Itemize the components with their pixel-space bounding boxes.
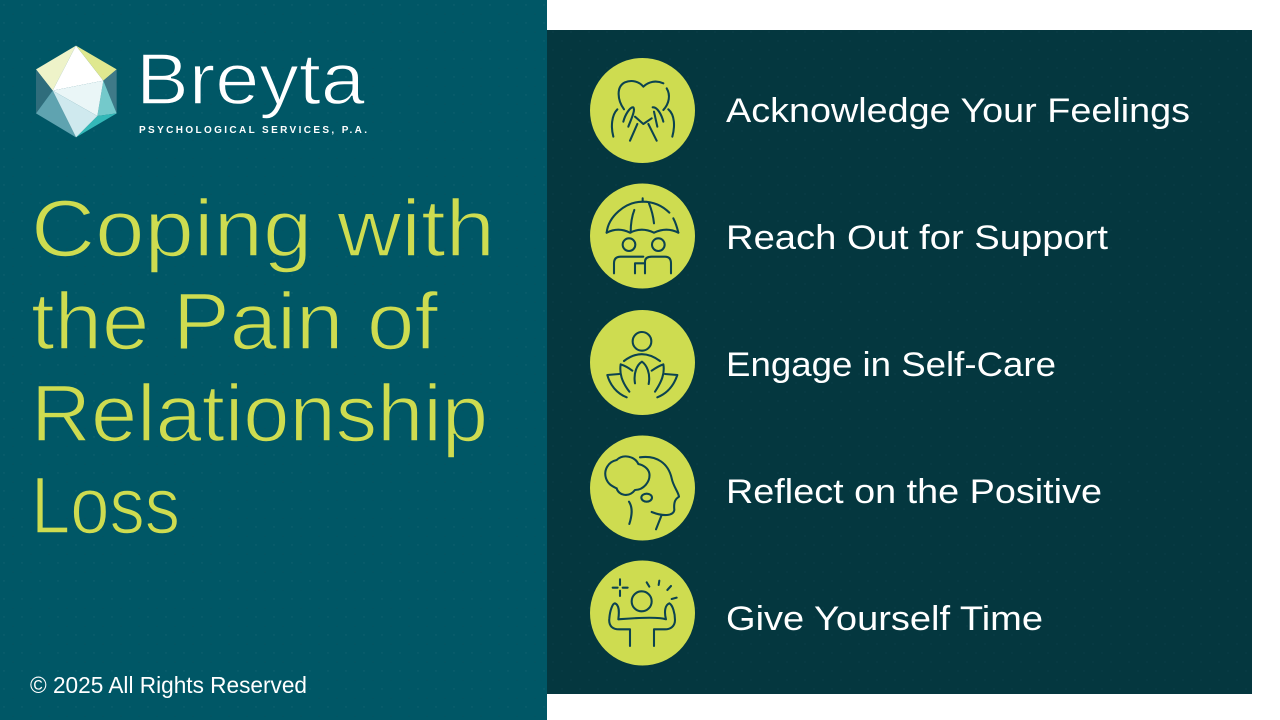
title: Coping with — [31, 184, 495, 274]
label: Give Yourself Time — [726, 600, 1043, 638]
icon: strong person with sparkles — [590, 560, 695, 666]
title: Loss — [31, 461, 180, 551]
icon: umbrella over two people — [590, 184, 695, 288]
icon: head with thought cloud — [590, 436, 695, 540]
logo tagline: PSYCHOLOGICAL SERVICES, P.A. — [139, 125, 367, 136]
logo: Breyta Psychological Services — [36, 40, 367, 137]
label: Reach Out for Support — [726, 219, 1109, 257]
title: the Pain of — [31, 277, 439, 367]
icon: hands holding heart — [590, 58, 695, 163]
item: Acknowledge Your Feelings — [590, 58, 1190, 163]
label: Acknowledge Your Feelings — [726, 92, 1190, 130]
item: Give Yourself Time — [590, 560, 1043, 666]
label: Engage in Self-Care — [726, 346, 1056, 384]
item: Reach Out for Support — [590, 184, 1109, 288]
icon: faceted hexagon gem — [36, 46, 117, 137]
icon: person meditating on lotus — [590, 310, 695, 415]
title — [31, 184, 495, 551]
item: Reflect on the Positive — [590, 436, 1102, 540]
copyright footer: © 2025 All Rights Reserved — [30, 672, 307, 698]
panel: left teal background — [0, 0, 547, 720]
title: Relationship — [31, 369, 488, 459]
panel: right dark background — [547, 30, 1252, 694]
logo wordmark: Breyta — [136, 40, 366, 120]
item: Engage in Self-Care — [590, 310, 1056, 415]
label: Reflect on the Positive — [726, 473, 1102, 511]
